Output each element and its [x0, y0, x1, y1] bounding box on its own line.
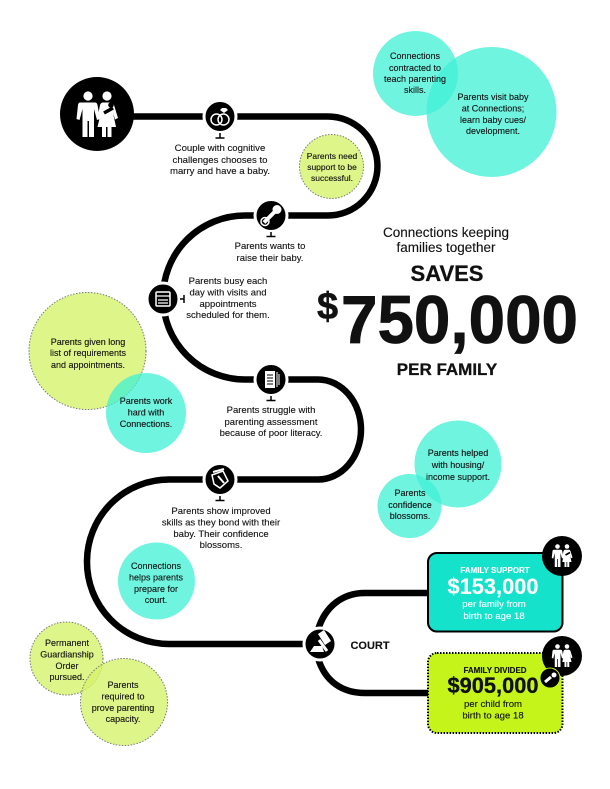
callouts: requirements: hard with — [128, 408, 164, 418]
callouts: connections contracted: Parents visit baby — [457, 92, 529, 102]
callouts: housing and confidence: confidence — [388, 500, 432, 510]
callout: parents need support: support to be — [307, 162, 357, 172]
icon: baby — [540, 668, 560, 688]
panel: family divided: per child from — [464, 699, 522, 710]
callouts: guardianship: capacity. — [106, 714, 140, 724]
callout: parents need support: successful. — [311, 173, 353, 183]
text: parents show: baby. Their confidence — [173, 529, 269, 540]
panel: family divided — [428, 653, 562, 733]
text: parents busy: Parents busy each — [189, 276, 267, 287]
callouts: requirements: and appointments. — [51, 360, 125, 370]
callout: parents need support — [300, 134, 364, 198]
icon: family support parents — [542, 536, 582, 576]
callouts: requirements: Connections. — [120, 419, 172, 429]
timeline path — [87, 116, 428, 693]
text: parents want: raise their baby. — [237, 253, 303, 264]
panel: family divided: birth to age 18 — [462, 710, 524, 722]
callouts: guardianship: Parents — [107, 680, 139, 690]
callout: prepare for court: prepare for — [134, 584, 178, 594]
callouts: housing and confidence: Parents helped — [428, 448, 488, 458]
text: parents struggle: Parents struggle with — [227, 405, 315, 416]
panel: family support: per family from — [462, 599, 526, 610]
callouts: requirements: Parents given long — [51, 337, 125, 347]
text: parents show: Parents show improved — [171, 506, 271, 517]
icon: rings node — [204, 100, 236, 132]
headline: savings: SAVES — [411, 261, 483, 286]
panel: family divided: FAMILY DIVIDED — [463, 666, 527, 675]
callouts: housing and confidence: with housing/ — [431, 460, 485, 470]
icon: gavel court node — [304, 628, 336, 660]
callouts: housing and confidence — [378, 420, 502, 538]
callouts: connections contracted: development. — [466, 126, 520, 136]
callouts: guardianship: Order — [55, 661, 79, 671]
text: parents busy: appointments — [199, 299, 257, 310]
label: court: COURT — [350, 640, 390, 652]
callout: prepare for court — [118, 542, 195, 620]
callouts: requirements: list of requirements — [50, 348, 127, 358]
callouts: housing and confidence: blossoms. — [390, 511, 430, 521]
callout: prepare for court: helps parents — [129, 572, 184, 582]
text: parents busy: day with visits and — [189, 288, 267, 298]
callouts: housing and confidence: income support. — [426, 472, 490, 482]
icon: handshake node — [204, 464, 236, 496]
headline: savings — [317, 225, 578, 379]
callouts: housing and confidence: Parents — [394, 488, 426, 498]
headline: savings: $ — [317, 286, 338, 328]
headline: savings: 750,000 — [341, 282, 578, 358]
panel: family divided: $905,000 — [448, 673, 538, 698]
callouts: connections contracted: learn baby cues/ — [460, 115, 527, 125]
connector tick — [266, 232, 276, 236]
callouts: connections contracted — [373, 31, 556, 177]
callouts: guardianship: Permanent — [45, 638, 90, 648]
icon: documents node — [255, 364, 287, 396]
connector tick — [216, 496, 224, 500]
callouts: guardianship: Guardianship — [40, 650, 94, 660]
connector tick — [216, 133, 224, 138]
callouts: connections contracted: Connections — [390, 51, 441, 61]
callouts: requirements — [29, 292, 186, 453]
headline: savings: Connections keeping — [383, 225, 509, 240]
callouts: guardianship: pursued. — [49, 672, 85, 682]
callouts: connections contracted: contracted to — [389, 63, 441, 73]
callout: parents need support: Parents need — [307, 151, 358, 161]
text: parents struggle: parenting assessment — [225, 417, 318, 428]
headline: savings: families together — [396, 240, 496, 255]
text: couple: Couple with cognitive — [175, 143, 265, 154]
panel: family support: FAMILY SUPPORT — [460, 566, 530, 575]
text: couple: challenges chooses to — [173, 155, 267, 166]
icon: pacifier node — [255, 200, 287, 232]
text: parents show: blossoms. — [200, 540, 242, 551]
panel: family support — [428, 553, 562, 632]
connector tick — [180, 295, 184, 303]
text: couple: marry and have a baby. — [170, 166, 270, 177]
callout: prepare for court: Connections — [131, 561, 182, 571]
text: parents struggle: because of poor literacy. — [220, 428, 322, 439]
callouts: connections contracted: skills. — [404, 85, 426, 95]
icon: calendar node — [147, 283, 179, 315]
callouts: connections contracted: at Connections; — [462, 104, 524, 114]
icon: parents with baby start — [60, 77, 134, 151]
panel: family support: birth to age 18 — [463, 611, 525, 622]
text: parents busy: scheduled for them. — [186, 310, 270, 321]
icon: family divided parents — [542, 636, 582, 676]
text: parents show: skills as they bond with their — [162, 518, 280, 528]
callouts: connections contracted: teach parenting — [384, 74, 446, 84]
headline: savings: PER FAMILY — [397, 360, 498, 379]
callouts: requirements: Parents work — [120, 396, 173, 406]
text: parents want: Parents wants to — [235, 241, 305, 252]
callouts: guardianship — [30, 622, 168, 746]
panel: family support: $153,000 — [448, 574, 538, 599]
connector tick — [266, 396, 276, 400]
callouts: guardianship: prove parenting — [92, 703, 154, 713]
callout: prepare for court: court. — [145, 595, 167, 605]
callouts: guardianship: required to — [101, 692, 145, 702]
